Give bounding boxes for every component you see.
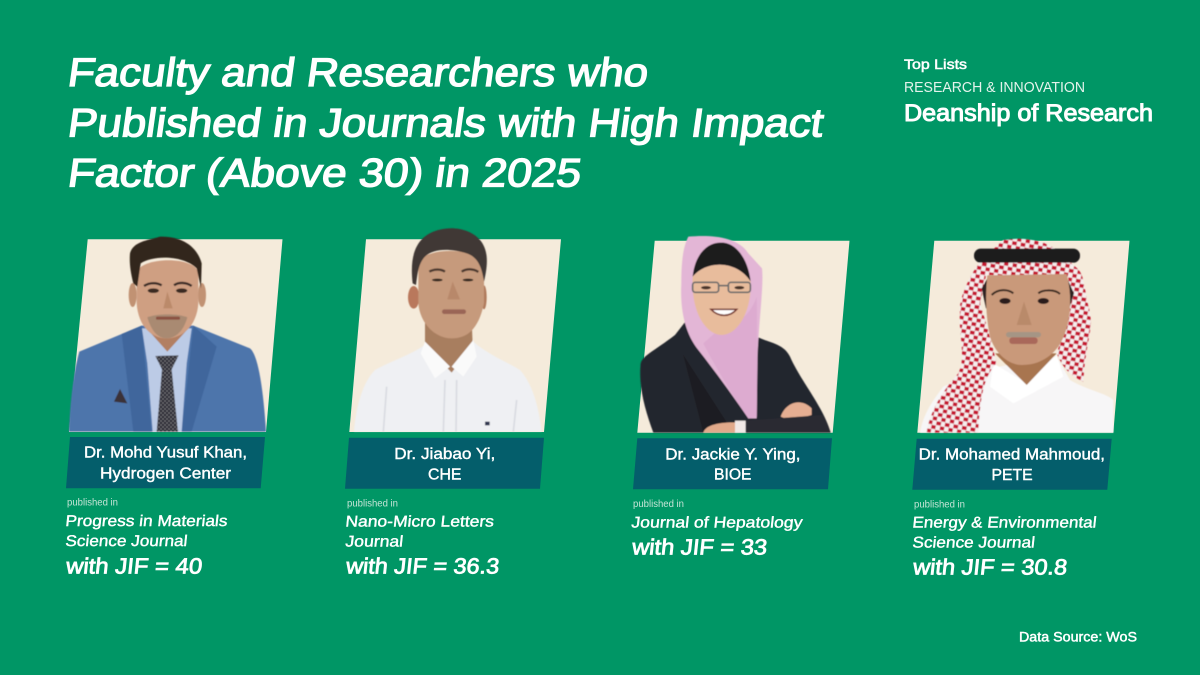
name 3: [665, 446, 800, 484]
journal 2: Journal: [345, 534, 404, 551]
JIF value 1: with JIF = 40: [64, 553, 204, 578]
photo panel 4: [917, 241, 1130, 433]
journal 1: Progress in Materials: [65, 513, 229, 530]
photo panel 3: [637, 241, 850, 433]
published label 3: published in: [633, 499, 684, 510]
title: Published in Journals with High Impact: [65, 101, 827, 145]
name 2: CHE: [428, 466, 462, 483]
journal 1: Science Journal: [65, 533, 188, 550]
name 4: PETE: [992, 467, 1033, 484]
name 4: Dr. Mohamed Mahmoud,: [919, 446, 1105, 463]
card: Dr. Mohamed Mahmoud: [911, 239, 1130, 579]
header: department block: RESEARCH & INNOVATION: [904, 80, 1085, 96]
published label 1: published in: [67, 498, 118, 509]
portrait 4: [920, 239, 1113, 433]
title: [65, 50, 827, 195]
photo panel 1: [69, 239, 282, 432]
JIF value 3: with JIF = 33: [630, 534, 769, 559]
card: Dr. Jiabao Yi: [344, 228, 561, 578]
portrait 2: [354, 228, 542, 432]
portrait 1: [69, 237, 266, 432]
journal 4: [912, 515, 1097, 552]
title: Faculty and Researchers who: [65, 50, 652, 95]
portrait 3: [640, 236, 831, 433]
title: Factor (Above 30) in 2025: [65, 151, 585, 195]
journal 3: Journal of Hepatology: [631, 514, 804, 531]
published label 2: published in: [347, 498, 398, 509]
published label 4: published in: [914, 500, 965, 511]
name 3: BIOE: [714, 467, 752, 484]
header: department block: Top Lists: [904, 56, 967, 72]
name bar 1: [66, 437, 265, 488]
name bar 2: [345, 438, 544, 489]
JIF value 2: with JIF = 36.3: [344, 553, 501, 578]
name 3: Dr. Jackie Y. Ying,: [665, 446, 800, 463]
header: department block: Deanship of Research: [904, 100, 1153, 127]
header: department block: [904, 56, 1153, 127]
journal 4: Energy & Environmental: [912, 515, 1097, 532]
data source note: Data Source: WoS: [1019, 630, 1137, 645]
journal 4: Science Journal: [912, 535, 1036, 552]
name bar 3: [633, 438, 832, 489]
journal 2: [345, 514, 495, 551]
name 1: Dr. Mohd Yusuf Khan,: [84, 445, 247, 462]
name 1: [84, 445, 247, 482]
name bar 4: [912, 439, 1112, 490]
name 1: Hydrogen Center: [100, 465, 232, 482]
photo panel 2: [349, 239, 561, 432]
card: Dr. Jackie Y. Ying: [630, 236, 850, 559]
card: Dr. Mohd Yusuf Khan: [64, 237, 282, 578]
name 4: [919, 446, 1105, 484]
journal 2: Nano-Micro Letters: [345, 514, 495, 531]
name 2: Dr. Jiabao Yi,: [394, 446, 495, 463]
JIF value 4: with JIF = 30.8: [911, 554, 1069, 579]
name 2: [394, 446, 495, 483]
journal 1: [65, 513, 229, 550]
